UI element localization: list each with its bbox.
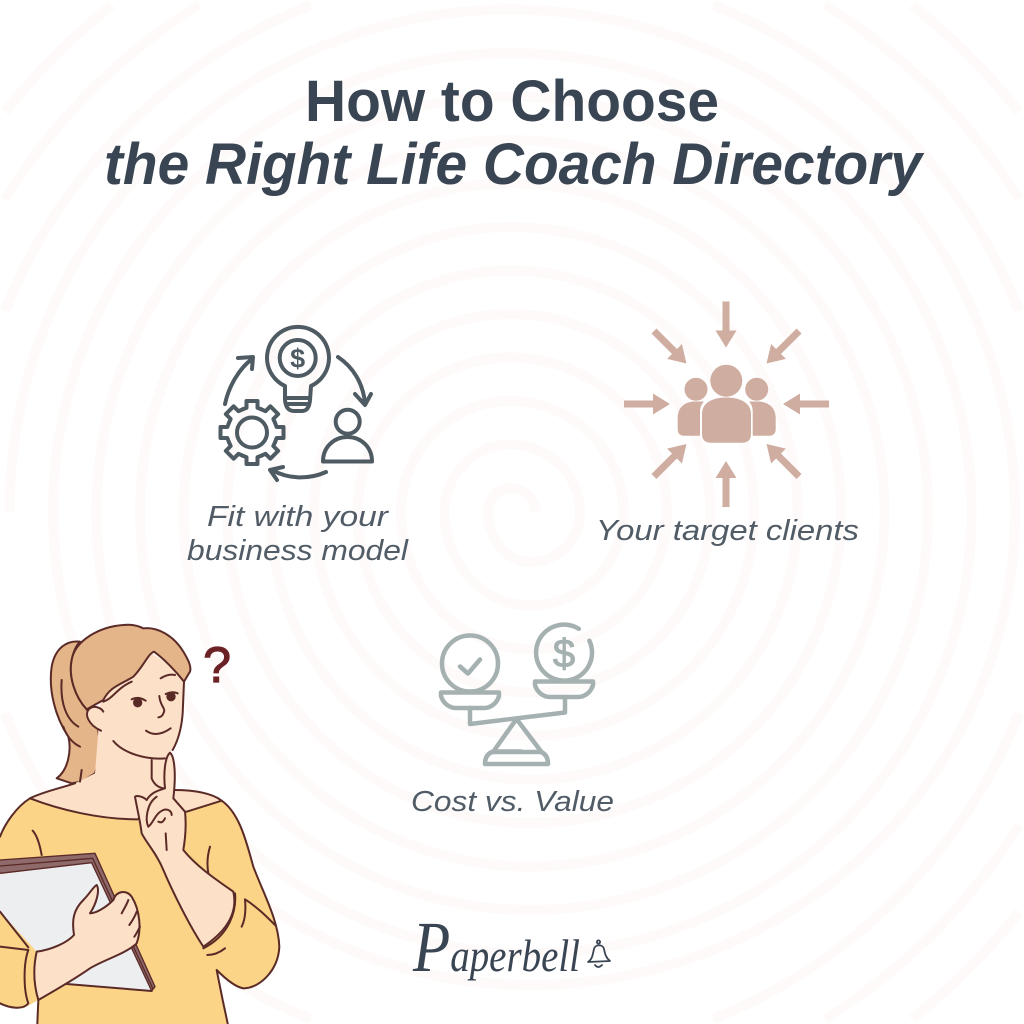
- knuckle lines: [122, 900, 140, 937]
- finger details: [147, 797, 172, 850]
- icon part: inward arrows: [624, 302, 829, 507]
- icon part: three people: [678, 365, 776, 443]
- shirt fill: [0, 798, 279, 1024]
- question mark: ?: [203, 637, 231, 693]
- icon part: dollar coin: [536, 625, 592, 681]
- facial features: [103, 675, 178, 734]
- title: How to Choose: [305, 69, 719, 134]
- ponytail: [51, 641, 99, 783]
- logo: Paperbell: [412, 907, 610, 987]
- hair strands: [61, 680, 82, 782]
- logo wordmark: Paperbell: [412, 907, 580, 987]
- icon: cost vs value scale: [441, 625, 593, 764]
- icon: target clients: [624, 302, 829, 507]
- icon part: gear: [220, 401, 284, 464]
- holding hand: [34, 885, 139, 1000]
- hair: [71, 625, 190, 709]
- label: fit with your business model: business model: [187, 535, 410, 567]
- icon part: light bulb: [267, 327, 329, 411]
- book: [0, 853, 155, 991]
- chest and neck: [30, 730, 222, 819]
- icon: business model cycle: [220, 327, 372, 480]
- face: [100, 653, 184, 759]
- shirt outline: [0, 798, 279, 1023]
- icon: bell: [588, 940, 610, 967]
- raised hand and forearm: [135, 753, 234, 947]
- right sleeve details: [33, 831, 275, 955]
- label: fit with your business model: Fit with your: [207, 501, 390, 533]
- label: cost vs value: Cost vs. Value: [411, 786, 614, 818]
- icon part: check coin: [442, 636, 498, 692]
- icon part: balance beam and pans: [441, 682, 593, 764]
- face outline: [113, 682, 184, 759]
- title: the Right Life Coach Directory: [104, 132, 925, 197]
- icon part: cycle arrows: [225, 357, 371, 480]
- neckline shoulder lines: [30, 760, 222, 801]
- icon part: person: [323, 410, 372, 462]
- title: [104, 69, 925, 197]
- ear: [87, 707, 103, 731]
- label: your target clients: Your target clients: [596, 515, 859, 547]
- icon part: dollar coin: $: [553, 632, 575, 676]
- label: fit with your business model: [187, 501, 410, 567]
- left sleeve: [0, 947, 28, 1008]
- icon part: light bulb: $: [290, 344, 305, 374]
- illustration: thoughtful woman holding a book: [0, 625, 279, 1024]
